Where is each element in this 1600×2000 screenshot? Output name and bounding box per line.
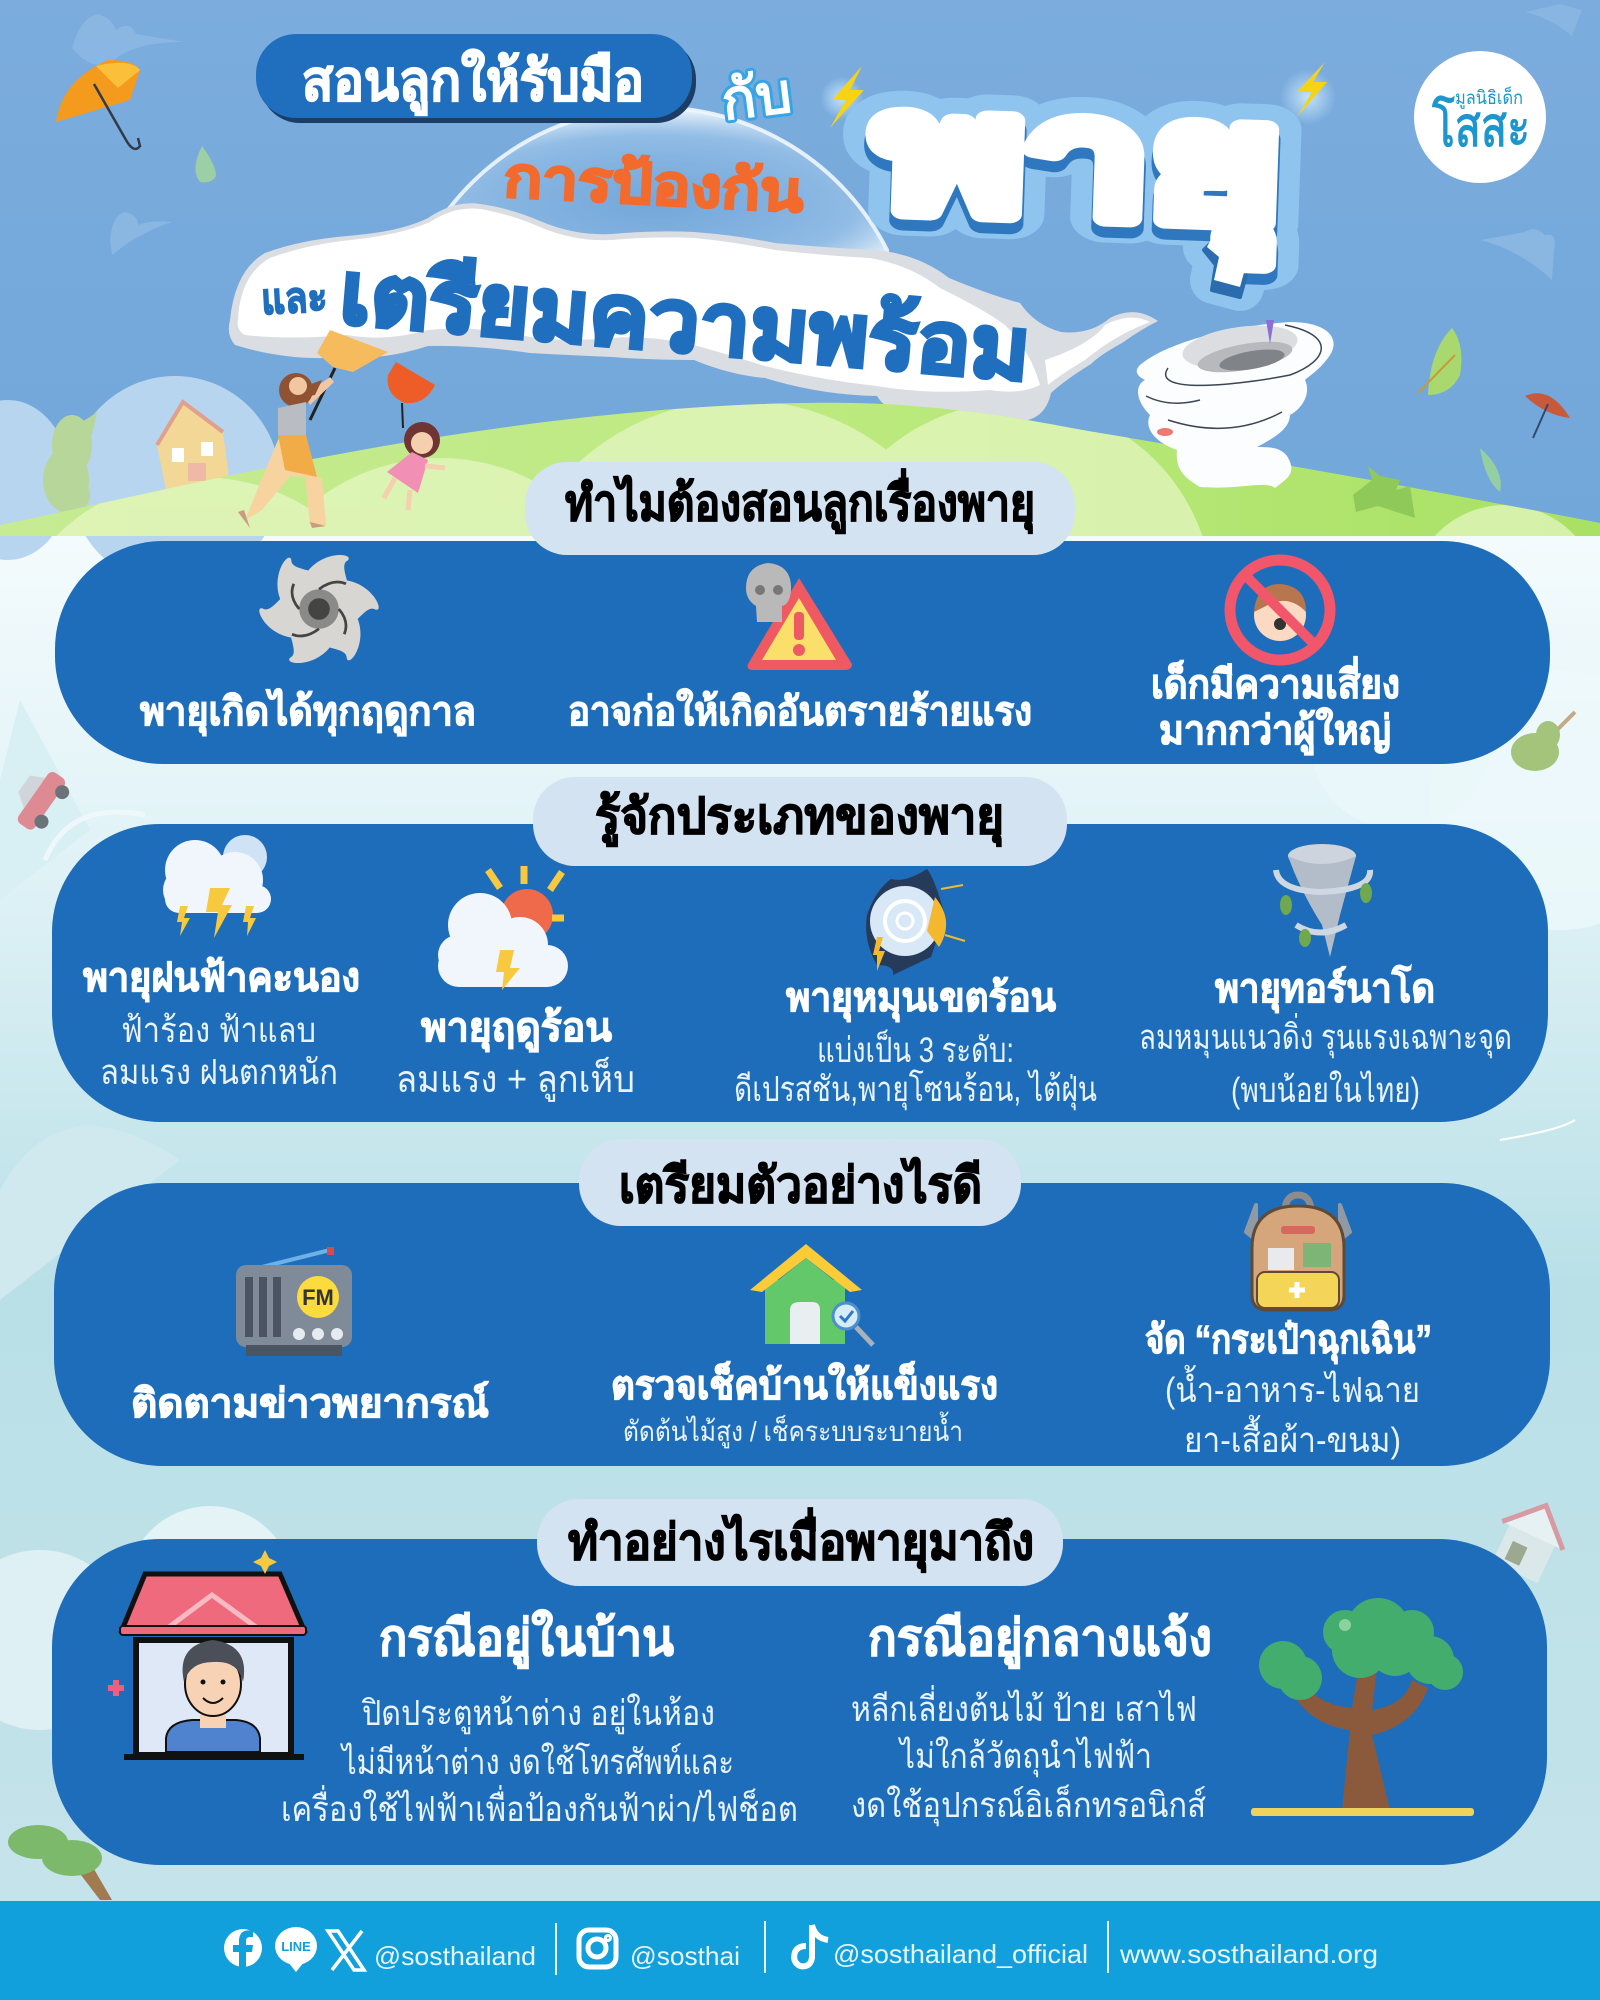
illustration: child with red umbrella: [384, 362, 445, 510]
text: ปิดประตูหน้าต่าง อยู่ในห้อง: ปิดประตูหน้าต่าง อยู่ในห้อง: [361, 1693, 715, 1734]
banner word: เตรียมความพร้อม: เตรียมความพร้อม: [336, 245, 1034, 399]
icon: sun behind thunder cloud: [438, 866, 568, 990]
illustration: green hill: [0, 403, 1600, 536]
illustration: pale bushes on the hill: [56, 404, 1575, 536]
heading pill: ทำอย่างไรเมื่อพายุมาถึง: [537, 1499, 1063, 1586]
text: พายุหมุนเขตร้อน: พายุหมุนเขตร้อน: [786, 976, 1056, 1023]
text: เด็กมีความเสี่ยงมากกว่าผู้ใหญ่: เด็กมีความเสี่ยง: [1151, 656, 1400, 707]
text: งดใช้อุปกรณ์อิเล็กทรอนิกส์: งดใช้อุปกรณ์อิเล็กทรอนิกส์: [851, 1784, 1206, 1826]
heading pill: ทำไมต้องสอนลูกเรื่องพายุ: [525, 462, 1075, 555]
illustration: flying leaf and umbrella right: [1418, 328, 1570, 492]
text: แบ่งเป็น 3 ระดับ:: แบ่งเป็น 3 ระดับ:: [817, 1029, 1014, 1070]
icon: facebook: [224, 1929, 262, 1967]
icon: tropical cyclone: [866, 869, 965, 975]
logo: มูลนิธิเด็กโสสะ: โสสะ: [1432, 95, 1530, 158]
text: (พบน้อยในไทย): (พบน้อยในไทย): [1231, 1070, 1420, 1110]
text: กรณีอยู่ในบ้าน: กรณีอยู่ในบ้าน: [379, 1609, 674, 1669]
text: @sosthailand_official: @sosthailand_official: [833, 1939, 1088, 1969]
title word: การป้องกัน: การป้องกัน: [502, 145, 805, 224]
footer bar: [0, 1901, 1600, 2000]
text: พายุทอร์นาโด: พายุทอร์นาโด: [1215, 965, 1435, 1014]
logo: มูลนิธิเด็กโสสะ: [1414, 51, 1546, 183]
illustration: windblown tree bottom left: [8, 1825, 112, 1900]
icon: leaf: [195, 146, 216, 182]
illustration: cloud banner with title: [229, 203, 1158, 429]
icon: lightning bolt right: [1280, 62, 1336, 125]
text: ติดตามข่าวพยากรณ์: ติดตามข่าวพยากรณ์: [131, 1381, 489, 1426]
icon: no child prohibited sign: [1230, 560, 1330, 660]
illustration: flying house right: [1485, 1492, 1577, 1587]
icon: LINE: LINE: [281, 1939, 311, 1954]
icon: flying orange umbrella: [56, 60, 140, 149]
heading pill: ทำไมต้องสอนลูกเรื่องพายุ: ทำไมต้องสอนลูกเรื่องพายุ: [565, 468, 1035, 534]
text: (น้ำ-อาหาร-ไฟฉาย: (น้ำ-อาหาร-ไฟฉาย: [1165, 1364, 1420, 1410]
panel: types of storms: [52, 777, 1548, 1122]
text: อาจก่อให้เกิดอันตรายร้ายแรง: อาจก่อให้เกิดอันตรายร้ายแรง: [568, 688, 1032, 734]
title word: พายุ: พายุ: [872, 72, 1284, 276]
banner word: และ: และ: [260, 273, 328, 323]
illustration: wind swoosh: [45, 812, 145, 860]
illustration: overturned car: [4, 762, 75, 837]
icon: green house with magnifier: [750, 1244, 873, 1345]
text: ตรวจเช็คบ้านให้แข็งแรง: ตรวจเช็คบ้านให้แข็งแรง: [611, 1360, 998, 1408]
text: กรณีอยู่กลางแจ้ง: กรณีอยู่กลางแจ้ง: [868, 1610, 1212, 1669]
icon: FM radio: [236, 1247, 352, 1356]
text: พายุฝนฟ้าคะนอง: พายุฝนฟ้าคะนอง: [83, 956, 360, 1003]
text: www.sosthailand.org: www.sosthailand.org: [1119, 1939, 1378, 1969]
panel: how to prepare: [54, 1139, 1550, 1466]
heading pill: รู้จักประเภทของพายุ: รู้จักประเภทของพายุ: [595, 790, 1004, 847]
title pill: สอนลูกให้รับมือ: สอนลูกให้รับมือ: [302, 48, 644, 116]
icon: X: [328, 1931, 364, 1970]
icon: LINE: [275, 1927, 317, 1972]
panel: what to do when the storm arrives: [52, 1499, 1547, 1865]
icon: TikTok: [794, 1925, 828, 1966]
icon: tornado: [1276, 844, 1372, 957]
title word: พายุ: พายุ: [872, 62, 1284, 266]
text: พายุฤดูร้อน: พายุฤดูร้อน: [421, 1006, 612, 1053]
icon: thunderstorm cloud: [163, 835, 271, 938]
illustration: leaf branch right: [1511, 712, 1575, 771]
heading pill: ทำอย่างไรเมื่อพายุมาถึง: ทำอย่างไรเมื่อพายุมาถึง: [568, 1507, 1034, 1573]
text: ไม่ใกล้วัตถุนำไฟฟ้า: ไม่ใกล้วัตถุนำไฟฟ้า: [897, 1736, 1152, 1777]
text: ลมหมุนแนวดิ่ง รุนแรงเฉพาะจุด: ลมหมุนแนวดิ่ง รุนแรงเฉพาะจุด: [1139, 1013, 1512, 1058]
heading pill: เตรียมตัวอย่างไรดี: [579, 1139, 1021, 1226]
text: เด็กมีความเสี่ยงมากกว่าผู้ใหญ่: [1151, 656, 1400, 755]
illustration: mother holding broken umbrella: [238, 330, 388, 528]
text: ฟ้าร้อง ฟ้าแลบ: ฟ้าร้อง ฟ้าแลบ: [121, 1011, 316, 1050]
icon: Instagram: [579, 1930, 616, 1967]
illustration: protective dome: [423, 107, 887, 262]
text: ตัดต้นไม้สูง / เช็คระบบระบายน้ำ: ตัดต้นไม้สูง / เช็คระบบระบายน้ำ: [623, 1411, 963, 1449]
text: @sosthai: @sosthai: [630, 1941, 740, 1971]
text: ยา-เสื้อผ้า-ขนม): ยา-เสื้อผ้า-ขนม): [1184, 1414, 1401, 1460]
illustration: tornado: [1137, 319, 1334, 488]
background: pale lower area with clouds: [0, 534, 1600, 1904]
background: stormy sky: [0, 0, 1600, 540]
icon: warning triangle with skull: [746, 563, 852, 670]
title pill: สอนลูกให้รับมือ: [256, 34, 696, 123]
text: พายุเกิดได้ทุกฤดูกาล: พายุเกิดได้ทุกฤดูกาล: [140, 688, 476, 737]
icon: emergency backpack: [1246, 1195, 1350, 1310]
text: ไม่มีหน้าต่าง งดใช้โทรศัพท์และ: ไม่มีหน้าต่าง งดใช้โทรศัพท์และ: [340, 1742, 734, 1782]
icon: FM radio: FM: [302, 1285, 334, 1310]
text: ลมแรง + ลูกเห็บ: ลมแรง + ลูกเห็บ: [396, 1056, 635, 1102]
title word: กับ: กับ: [718, 61, 795, 132]
text: ลมแรง ฝนตกหนัก: ลมแรง ฝนตกหนัก: [100, 1053, 338, 1092]
title word: พายุ: พายุ: [872, 62, 1284, 266]
text: เด็กมีความเสี่ยงมากกว่าผู้ใหญ่: มากกว่าผู้ใหญ่: [1159, 707, 1391, 755]
text: จัด “กระเป๋าฉุกเฉิน”: จัด “กระเป๋าฉุกเฉิน”: [1145, 1318, 1432, 1365]
heading pill: เตรียมตัวอย่างไรดี: เตรียมตัวอย่างไรดี: [619, 1156, 982, 1213]
panel: why teach children about storms: [55, 462, 1550, 764]
icon: person inside house: [108, 1550, 306, 1760]
icon: lightning bolt left: [820, 66, 864, 128]
text: หลีกเลี่ยงต้นไม้ ป้าย เสาไฟ: หลีกเลี่ยงต้นไม้ ป้าย เสาไฟ: [851, 1685, 1197, 1729]
text: เครื่องใช้ไฟฟ้าเพื่อป้องกันฟ้าผ่า/ไฟช็อต: เครื่องใช้ไฟฟ้าเพื่อป้องกันฟ้าผ่า/ไฟช็อต: [281, 1785, 798, 1829]
text: @sosthailand: @sosthailand: [374, 1941, 536, 1971]
illustration: grass tuft: [1353, 466, 1415, 518]
background: wind-blown shapes in the sky: [72, 4, 1582, 280]
title word: พายุ: [872, 62, 1284, 297]
logo: มูลนิธิเด็กโสสะ: มูลนิธิเด็ก: [1455, 85, 1523, 109]
heading pill: รู้จักประเภทของพายุ: [533, 777, 1067, 866]
icon: tree: [1251, 1598, 1474, 1816]
icon: hurricane swirl: [257, 555, 381, 663]
text: ดีเปรสชัน,พายุโซนร้อน, ไต้ฝุ่น: ดีเปรสชัน,พายุโซนร้อน, ไต้ฝุ่น: [734, 1069, 1097, 1110]
illustration: background circles, tree and house: [0, 376, 280, 586]
